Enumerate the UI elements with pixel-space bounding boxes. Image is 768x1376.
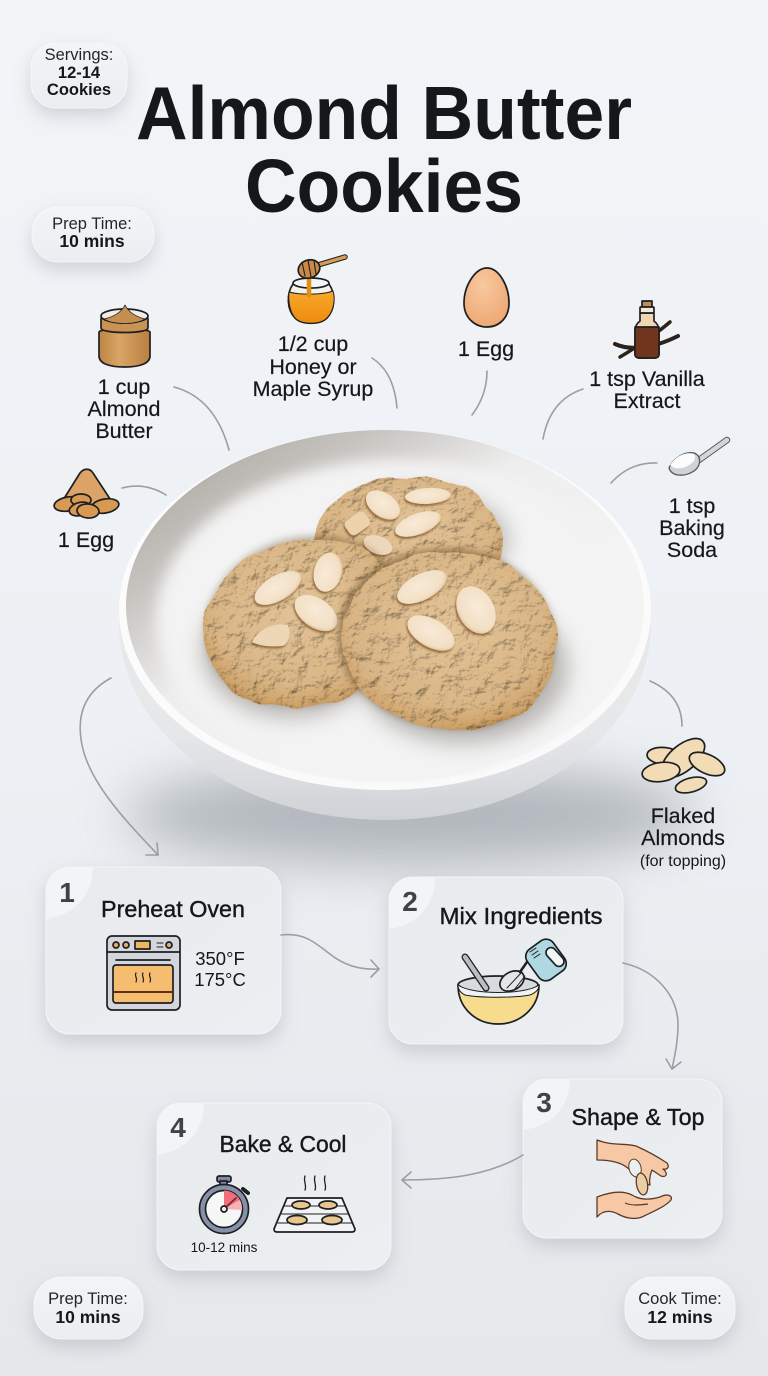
ingredient: flaked almonds — [640, 731, 728, 870]
badge: prep time bottom — [34, 1277, 143, 1339]
badge: servings: 12-14 — [58, 64, 101, 82]
ingredient: flaked almonds: Flaked — [651, 804, 715, 828]
icon: bowl and hand mixer — [458, 936, 570, 1024]
back cookie — [314, 476, 503, 590]
ingredient: honey: Honey or — [269, 355, 357, 379]
step 4: bake and cool: 4 — [170, 1112, 186, 1143]
icon: honey jar with dipper — [288, 257, 345, 323]
ingredient: honey: Maple Syrup — [253, 377, 373, 401]
ingredient: vanilla: 1 tsp Vanilla — [589, 367, 705, 391]
plate well — [156, 460, 632, 780]
badge: prep time top: 10 mins — [59, 231, 125, 251]
step 2: mix ingredients: 2 — [402, 886, 418, 917]
icon: oven — [107, 936, 180, 1010]
step 4: bake and cool: 10-12 mins — [191, 1240, 258, 1255]
front cookie — [339, 549, 557, 730]
ingredient: almond flour: 1 Egg — [58, 528, 114, 552]
icon: flaked almonds — [641, 731, 728, 796]
icon: stopwatch — [200, 1176, 248, 1234]
ingredient: honey — [253, 257, 373, 401]
oven temperature: 350°F — [195, 948, 245, 969]
plate rim — [119, 430, 651, 790]
ingredient: honey: 1/2 cup — [278, 332, 348, 356]
badge: cook time — [625, 1277, 735, 1339]
ingredient: almond butter: Butter — [95, 419, 153, 443]
cookie shadows — [202, 490, 568, 744]
ingredient: almond butter: Almond — [88, 397, 160, 421]
title: Almond Butter — [136, 71, 632, 155]
plate inner wall — [126, 430, 644, 782]
connector: egg — [472, 371, 487, 415]
icon: vanilla bottle and beans — [615, 301, 678, 358]
ingredient: baking soda: Baking — [659, 516, 725, 540]
ingredient: egg — [458, 268, 514, 361]
connector: almond butter — [174, 387, 229, 450]
step 3: shape and top: 3 — [536, 1087, 552, 1118]
step 2: mix ingredients: Mix Ingredients — [440, 903, 602, 929]
title — [136, 71, 632, 228]
icon: spoon — [669, 440, 727, 475]
ingredient: almond butter: 1 cup — [98, 375, 150, 399]
ingredient: baking soda: 1 tsp — [669, 494, 715, 518]
connector: baking soda — [611, 463, 657, 483]
ingredient: vanilla — [589, 301, 705, 413]
arrow: step 1 to step 2 — [281, 935, 379, 977]
step 1: preheat oven: 1 — [59, 877, 75, 908]
icon: almond flour pile — [53, 469, 120, 519]
connector: vanilla — [543, 389, 583, 439]
badge: prep time top — [32, 207, 154, 262]
ingredient: flaked almonds: Almonds — [641, 826, 725, 850]
title: Cookies — [245, 144, 523, 228]
plate cast shadow — [125, 765, 695, 865]
icon: egg — [464, 268, 509, 327]
connector: almond flour — [122, 486, 166, 495]
arrow: step 3 to step 4 — [402, 1155, 523, 1188]
ingredient: vanilla: Extract — [614, 389, 680, 413]
badge: servings: Cookies — [47, 81, 111, 99]
badge: prep time bottom: 10 mins — [55, 1307, 121, 1327]
step 1: preheat oven: Preheat Oven — [101, 896, 245, 922]
badge: cook time: Cook Time: — [638, 1290, 722, 1308]
plate side — [119, 430, 651, 820]
step 3: shape and top: Shape & Top — [572, 1104, 704, 1130]
left cookie — [204, 536, 397, 708]
icon: hands with almond — [597, 1140, 671, 1218]
step 3: shape and top — [523, 1079, 722, 1238]
ingredient: baking soda: Soda — [667, 538, 717, 562]
arrow: plate to step 1 — [80, 678, 158, 855]
ingredient: baking soda — [659, 440, 727, 562]
step 2: mix ingredients — [389, 877, 623, 1044]
badge: cook time: 12 mins — [647, 1307, 713, 1327]
arrow: step 2 to step 3 — [623, 963, 681, 1069]
connector: flaked almonds — [650, 681, 682, 726]
step 4: bake and cool — [157, 1103, 391, 1270]
icon: cooling rack with steam — [274, 1176, 355, 1232]
icon: almond butter jar — [99, 305, 150, 367]
badge: prep time top: Prep Time: — [52, 215, 132, 233]
step 1: preheat oven — [46, 867, 281, 1034]
badge: prep time bottom: Prep Time: — [48, 1290, 128, 1308]
plate with cookies — [119, 430, 695, 865]
ingredient: egg: 1 Egg — [458, 337, 514, 361]
connector: honey — [372, 358, 397, 408]
ingredient: almond butter — [88, 305, 160, 443]
oven temperature: 175°C — [194, 969, 246, 990]
badge: servings — [31, 43, 127, 108]
step 4: bake and cool: Bake & Cool — [220, 1131, 346, 1157]
ingredient: almond flour — [53, 469, 120, 552]
ingredient: flaked almonds: (for topping) — [640, 853, 726, 870]
oven temperature — [194, 948, 246, 990]
badge: servings: Servings: — [45, 46, 113, 64]
